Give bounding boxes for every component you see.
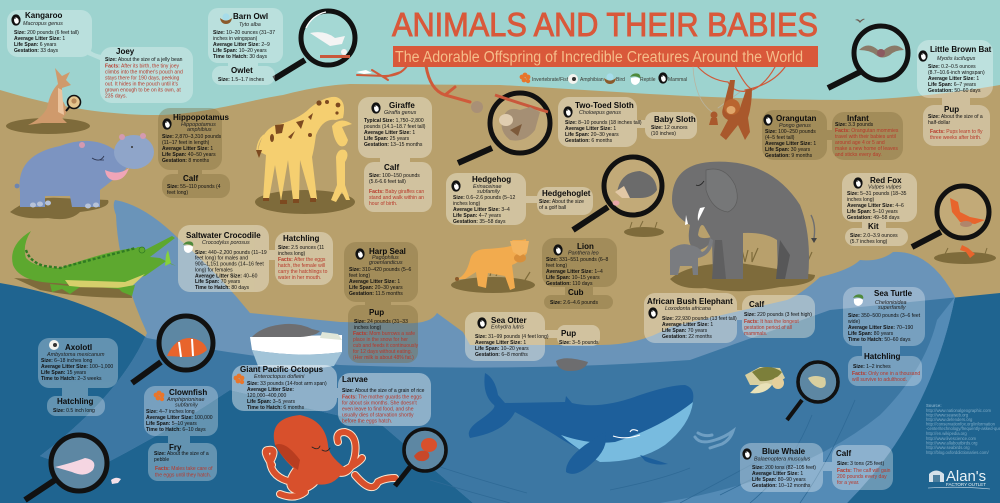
small axolotl	[111, 478, 121, 484]
small hedgehog ground patch	[624, 221, 664, 237]
panel: blue whale and calf: Gestation: 10–12 months	[752, 483, 811, 489]
panel: little brown bat and pup: Size: 0.2–0.5 ounces	[928, 64, 976, 70]
panel: sea otter and pup: Life Span: 10–20 years	[475, 346, 529, 352]
panel: blue whale and calf: Life Span: 80–90 years	[752, 477, 806, 483]
panel: clownfish and fry: Size: About the size of a	[154, 451, 209, 457]
magnifier: red fox	[912, 186, 989, 247]
legend: Mammal	[668, 77, 687, 83]
panel: hedgehog and hedgehoglet: inches long)	[453, 201, 481, 207]
panel: little brown bat and pup: Average Litter Size: 1	[928, 76, 979, 82]
panel: clownfish and fry: Size: 4–7 inches long	[146, 409, 195, 415]
icon: kangaroo joey magnifier	[66, 96, 80, 111]
panel: red fox and kit: Size: 5–31 pounds (18–35	[847, 191, 907, 197]
panel: kangaroo and joey: Average Litter Size: 1	[14, 36, 65, 42]
panel: hippopotamus and calf: Calf	[183, 174, 198, 183]
panel: harp seal and pup: feet long)	[349, 273, 370, 279]
panel: clownfish and fry: Average Litter Size: 100,000	[146, 415, 213, 421]
panel: little brown bat and pup: Size: About the size of a	[928, 114, 983, 120]
panel: sea otter and pup: Pup	[561, 329, 576, 338]
panel: hippopotamus and calf: (11–17 feet in length)	[162, 140, 210, 146]
panel: barn owl and owlet: Size: 1.5–1.7 inches	[218, 77, 264, 83]
panel: giraffe and calf: Life Span: 25 years	[364, 136, 410, 142]
panel: giraffe and calf: Giraffe	[389, 101, 415, 110]
panel: blue whale and calf: 200 pounds every day	[837, 474, 887, 480]
panel: orangutan and infant: Size: 3.3 pounds	[835, 122, 874, 128]
branches and vines	[357, 66, 785, 112]
panel: blue whale and calf: Calf	[836, 449, 851, 458]
panel: saltwater crocodile and hatchling: Size: 2.5 ounces (11	[278, 245, 324, 251]
panel: african bush elephant and calf: Facts: It has the longest	[744, 319, 799, 325]
panel: kangaroo and joey: Size: 200 pounds (6 feet tall)	[14, 30, 79, 36]
panel: orangutan and infant: Size: 100–250 pounds	[765, 129, 816, 135]
panel: hedgehog and hedgehoglet: Erinaceinae	[473, 184, 501, 190]
panel: red fox and kit: Kit	[868, 222, 879, 231]
panel: giant pacific octopus and larvae: Average Litter Size:	[247, 387, 294, 393]
panel: saltwater crocodile and hatchling: Life Span: 70 years	[195, 279, 241, 285]
panel: harp seal and pup: Harp Seal	[369, 247, 406, 256]
panel: hippopotamus and calf	[158, 108, 230, 198]
panel: sea turtle and hatchling: Size: 350–500 pounds (3–6 feet	[848, 313, 921, 319]
panel: orangutan and infant: travel with their babies until	[835, 134, 896, 140]
small owl on branch	[356, 70, 372, 74]
panel: axolotl and hatchling: Life Span: 15 years	[41, 370, 87, 376]
panel: giraffe and calf: Facts: Baby giraffes can	[369, 189, 424, 195]
panel: african bush elephant and calf: gestation period of all	[744, 325, 792, 331]
panel: hippopotamus and calf: feet long)	[167, 190, 188, 196]
panel: axolotl and hatchling: Hatchling	[57, 397, 94, 406]
panel: little brown bat and pup: Life Span: 6–7 years	[928, 82, 976, 88]
panel: giant pacific octopus and larvae: Facts: The mother guards the eggs	[342, 394, 422, 400]
small fox ground patch	[934, 245, 996, 264]
panel: saltwater crocodile and hatchling	[178, 225, 333, 292]
panel: blue whale and calf: Blue Whale	[762, 447, 806, 456]
panel: kangaroo and joey: Size: About the size of a jelly bean	[105, 57, 183, 63]
panel: lion and cub: Panthera leo	[568, 250, 599, 256]
panel: blue whale and calf	[740, 443, 893, 492]
panel: two-toed sloth and baby: Size: 12 ounces	[651, 125, 688, 131]
panel: kangaroo and joey: Gestation: 33 days	[14, 48, 59, 54]
panel: harp seal and pup: Life Span: 20–30 years	[349, 285, 403, 291]
sources list: http://www.nationalgeographic.com	[926, 408, 991, 413]
panel: sea otter and pup	[465, 312, 600, 361]
panel: giant pacific octopus and larvae: Larvae	[342, 375, 368, 384]
panel: clownfish and fry	[144, 386, 218, 481]
animal: ice floe and harp seal	[250, 324, 342, 369]
panel: kangaroo and joey: grown enough to be on its own, at	[105, 88, 181, 94]
panel: saltwater crocodile and hatchling: water in her mouth.	[278, 275, 321, 281]
legend: Bird	[616, 77, 625, 83]
panel: giant pacific octopus and larvae: even leave to find food, and she	[342, 406, 414, 412]
panel: little brown bat and pup: Myotis lucifugus	[937, 56, 976, 62]
panel: sea otter and pup: Gestation: 6–8 months	[475, 352, 528, 358]
panel: axolotl and hatchling: Average Litter Size: 100–1,000	[41, 364, 113, 370]
panel: blue whale and calf: for a year.	[837, 480, 859, 486]
panel: lion and cub: Size: 2.6–4.6 pounds	[550, 300, 598, 306]
panel: clownfish and fry: pebble	[154, 457, 169, 463]
panel: orangutan and infant: around age 4 or 5 and	[835, 140, 885, 146]
magnifier: sloth	[458, 93, 550, 163]
panel: red fox and kit	[842, 173, 917, 246]
panel: kangaroo and joey: Kangaroo	[25, 11, 62, 20]
panel: saltwater crocodile and hatchling: Average Litter Size: 40–60	[195, 274, 258, 280]
panel: clownfish and fry: Amphiprioninae	[166, 397, 204, 403]
panel: two-toed sloth and baby: Life Span: 20–30 years	[565, 132, 619, 138]
panel: two-toed sloth and baby: Size: 8–10 pounds (18 inches tall)	[565, 120, 642, 126]
panel: two-toed sloth and baby	[558, 97, 697, 147]
panel: harp seal and pup: (Her milk is about 48% fat.)	[353, 355, 414, 361]
panel: hippopotamus and calf: Hippopotamus	[181, 122, 216, 128]
panel: kangaroo and joey: out. It hides in the pouch until it's	[105, 82, 179, 88]
panel: hippopotamus and calf: Size: 55–110 pounds (4	[167, 184, 221, 190]
panel: giraffe and calf: Average Litter Size: 1	[364, 130, 415, 136]
panel: sea turtle and hatchling	[843, 287, 925, 386]
panel: little brown bat and pup: Little Brown Bat	[930, 45, 992, 54]
panel: little brown bat and pup	[917, 40, 993, 146]
panel: orangutan and infant: Pongo genus	[779, 123, 811, 129]
panel: harp seal and pup: Average Litter Size: 1	[349, 279, 400, 285]
panel: red fox and kit: Vulpes vulpes	[868, 184, 902, 190]
panel: harp seal and pup	[344, 242, 419, 363]
panel: african bush elephant and calf: Size: 220 pounds (3 feet high)	[744, 312, 812, 318]
panel: hippopotamus and calf: Gestation: 8 months	[162, 158, 210, 164]
panel: giraffe and calf: Giraffa genus	[384, 110, 417, 116]
giant whale silhouette	[40, 200, 955, 503]
panel: lion and cub: Average Litter Size: 1–4	[546, 269, 603, 275]
panel: orangutan and infant: make a new home of leaves	[835, 146, 898, 152]
panel: hedgehog and hedgehoglet: Life Span: 4–7 years	[453, 213, 501, 219]
legend	[520, 72, 687, 85]
panel: sea turtle and hatchling: will survive to adulthood.	[852, 377, 907, 383]
panel: giant pacific octopus and larvae: for about six months. She doesn't	[342, 400, 417, 406]
panel: saltwater crocodile and hatchling: Crocodylus porosus	[202, 240, 250, 246]
magnifier: octopus larva	[395, 429, 446, 486]
small clownfish	[202, 333, 208, 339]
panel: little brown bat and pup: three weeks after birth.	[930, 135, 981, 141]
panel: hippopotamus and calf: Average Litter Size: 1	[162, 146, 213, 152]
panel: hedgehog and hedgehoglet: Gestation: 35–58 days	[453, 219, 506, 225]
panel: hedgehog and hedgehoglet: Size: 0.6–2.6 pounds (5–12	[453, 195, 515, 201]
panel: barn owl and owlet	[208, 8, 283, 85]
magnifier: bat	[828, 26, 908, 88]
panel: sea turtle and hatchling: Size: 1–2 inches	[853, 364, 891, 370]
sources list: http://www.seaweb.org	[926, 412, 969, 418]
panel: harp seal and pup: Pagophilus	[372, 255, 399, 261]
panel: lion and cub: feet long)	[546, 263, 567, 269]
panel: harp seal and pup: Facts: Mom burrows a safe	[353, 331, 415, 337]
panel: sea otter and pup: Average Litter Size: 1	[475, 340, 526, 346]
sources list: http://en.wikipedia.org	[926, 431, 967, 436]
panel: red fox and kit: (5.7 inches long)	[850, 239, 888, 245]
animal: kangaroo	[6, 68, 90, 134]
panel: african bush elephant and calf: African Bush Elephant	[647, 297, 733, 306]
legend: Invertebrate/Fish	[532, 77, 570, 83]
panel: harp seal and pup: inches long)	[354, 325, 382, 331]
panel: blue whale and calf: Size: 200 tons (82–105 feet)	[752, 465, 816, 471]
panel: clownfish and fry: Facts: Males take care of	[155, 466, 213, 472]
panel: hippopotamus and calf: Size: 2,870–3,310 pounds	[162, 134, 222, 140]
panel: saltwater crocodile and hatchling: hatch, the female will	[278, 263, 325, 269]
panel: lion and cub: Life Span: 10–15 years	[546, 275, 600, 281]
sources list: Source:	[926, 403, 942, 408]
panel: giant pacific octopus and larvae	[232, 365, 431, 426]
panel: hedgehog and hedgehoglet: of a golf ball	[539, 205, 566, 211]
panel: sea turtle and hatchling: Facts: Only one in a thousand	[852, 371, 920, 377]
panel: saltwater crocodile and hatchling: Facts: After the eggs	[278, 257, 326, 263]
panel: barn owl and owlet: inches in wingspan)	[213, 36, 258, 42]
panel: giraffe and calf: Gestation: 13–15 months	[364, 142, 423, 148]
panel: kangaroo and joey: Facts: After its birth, the tiny joey	[105, 64, 180, 70]
panel: saltwater crocodile and hatchling: carry the hatchlings to	[278, 269, 328, 275]
panel: axolotl and hatchling: Ambystoma mexicanum	[46, 352, 105, 358]
panel: axolotl and hatchling: Time to Hatch: 2–3 weeks	[41, 376, 102, 382]
panel: kangaroo and joey: climbs into the mother's pouch and	[105, 70, 183, 76]
panel: sea otter and pup: Size: 31–99 pounds (4 feet long)	[475, 334, 549, 340]
panel: kangaroo and joey: Joey	[116, 47, 135, 56]
panel: little brown bat and pup: Facts: Pups learn to fly	[930, 129, 983, 135]
panel: barn owl and owlet: Time to Hatch: 30 days	[213, 54, 268, 60]
panel: giant pacific octopus and larvae: Giant Pacific Octopus	[240, 365, 324, 374]
panel: saltwater crocodile and hatchling: Time to Hatch: 80 days	[195, 285, 250, 291]
subtitle banner: The Adorable Offspring of Incredible Creatures Around the World	[395, 49, 803, 66]
panel: giraffe and calf	[358, 97, 432, 212]
animal: elephant with calf	[670, 162, 817, 291]
panel: kangaroo and joey	[7, 10, 193, 103]
sources list: http://www.livescience.com	[926, 436, 977, 441]
logo: Alan's Factory Outlet: Alan's	[946, 469, 986, 485]
magnifier: turtle hatchling	[787, 362, 838, 420]
panel: little brown bat and pup: Gestation: 50–60 days	[928, 88, 981, 94]
animal: orangutan	[709, 80, 752, 140]
animal: sea otter	[556, 358, 588, 371]
panel: orangutan and infant: Facts: Orangutan mommies	[835, 128, 899, 134]
panel: sea turtle and hatchling: superfamily	[878, 305, 906, 311]
panel: orangutan and infant: Infant	[847, 114, 869, 123]
panel: red fox and kit: Red Fox	[870, 176, 902, 185]
panel: giant pacific octopus and larvae: Life Span: 3–5 years	[247, 399, 295, 405]
panel: giant pacific octopus and larvae: before the eggs hatch.	[342, 418, 392, 424]
panel: clownfish and fry: Clownfish	[169, 388, 207, 397]
panel: two-toed sloth and baby: (10 inches)	[651, 131, 676, 137]
panel: barn owl and owlet: Tyto alba	[239, 22, 261, 28]
panel: giraffe and calf: (5.6-6.6 feet tall)	[369, 179, 406, 185]
panel: giant pacific octopus and larvae: usually dies of starvation shortly	[342, 412, 414, 418]
panel: barn owl and owlet: Size: 10–20 ounces (31–37	[213, 30, 275, 36]
panel: blue whale and calf: Balaenoptera musculus	[754, 456, 811, 462]
panel: hippopotamus and calf: amphibius	[187, 127, 212, 133]
panel: orangutan and infant: Orangutan	[776, 114, 817, 123]
panel: sea turtle and hatchling: Sea Turtle	[874, 289, 913, 298]
panel: giraffe and calf: Calf	[384, 163, 399, 172]
logo: Alan's Factory Outlet: FACTORY OUTLET	[946, 482, 986, 487]
animal: blue whale	[469, 373, 693, 474]
animal: giant pacific octopus	[266, 415, 395, 497]
panel: sea turtle and hatchling: Hatchling	[864, 352, 901, 361]
panel: saltwater crocodile and hatchling: feet long) for males and	[195, 256, 248, 262]
panel: harp seal and pup: for 12 days without eating.	[353, 349, 412, 355]
sources list: http://www.defenders.org	[926, 417, 973, 422]
magnifier: axolotl	[25, 435, 107, 500]
panel: african bush elephant and calf	[644, 293, 815, 343]
panel: sea turtle and hatchling: Chelonioidea	[875, 300, 906, 306]
panel: clownfish and fry: Fry	[169, 443, 182, 452]
panel: hedgehog and hedgehoglet: Hedgehoglet	[542, 189, 591, 198]
panel: orangutan and infant: Life Span: 30 years	[765, 147, 811, 153]
panel: saltwater crocodile and hatchling: 900–1,151 pounds (14–16 feet	[195, 262, 264, 268]
panel: harp seal and pup: Gestation: 11.5 months	[349, 291, 403, 297]
panel: two-toed sloth and baby: Choloepus genus	[579, 110, 621, 116]
panel: axolotl and hatchling: Size: 0.5 inch long	[53, 408, 95, 414]
panel: harp seal and pup: place in the snow for her	[353, 337, 408, 343]
panel: giraffe and calf: Typical Size: 1,750–2,800	[364, 118, 424, 124]
panel: lion and cub: Lion	[577, 242, 594, 251]
panel: hedgehog and hedgehoglet: Hedgehog	[472, 175, 511, 184]
small sloth	[471, 101, 483, 113]
sources list: http://www.allaboutbirds.org	[926, 440, 978, 446]
magnifier: owl	[274, 11, 355, 79]
panel: orangutan and infant	[762, 110, 903, 160]
animal: giraffe with calf	[255, 97, 355, 214]
panel: sea turtle and hatchling: Time to Hatch: 50–60 days	[848, 337, 911, 343]
small bat	[855, 19, 865, 23]
panel: sea otter and pup: Sea Otter	[491, 316, 527, 325]
magnifier: clownfish	[132, 316, 213, 383]
panel: red fox and kit: inches long)	[847, 197, 875, 203]
panel: barn owl and owlet: Life Span: 10–20 years	[213, 48, 267, 54]
panel: lion and cub: Size: 331–551 pounds (6–8	[546, 257, 608, 263]
panel: giraffe and calf: pounds (14.1–18.7 feet tall)	[364, 124, 426, 130]
panel: orangutan and infant: Gestation: 9 months	[765, 153, 813, 159]
panel: two-toed sloth and baby: Baby Sloth	[654, 115, 696, 124]
panel: clownfish and fry: the eggs until they hatch.	[155, 472, 211, 478]
panel: african bush elephant and calf: Loxodonta africana	[665, 306, 711, 312]
panel: blue whale and calf: Facts: The calf will gain	[837, 468, 891, 474]
panel: lion and cub: Cub	[568, 288, 584, 297]
panel: red fox and kit: Gestation: 49–58 days	[847, 215, 900, 221]
sources list	[926, 403, 1000, 455]
panel: sea turtle and hatchling: wide)	[848, 319, 860, 325]
panel: hedgehog and hedgehoglet: Size: About the size	[539, 199, 584, 205]
panel: african bush elephant and calf: Average Litter Size: 1	[662, 322, 713, 328]
panel: giraffe and calf: stand and walk within an	[369, 195, 424, 201]
panel: harp seal and pup: groenlandicus	[369, 260, 403, 266]
panel: blue whale and calf: Size: 3 tons (25 feet)	[837, 461, 884, 467]
panel: two-toed sloth and baby: Average Litter Size: 1	[565, 126, 616, 132]
panel: african bush elephant and calf: mammals.	[744, 331, 767, 337]
panel: saltwater crocodile and hatchling: Size: 440–2,200 pounds (11–19	[195, 250, 267, 256]
panel: sea turtle and hatchling: Life Span: 80 years	[848, 331, 894, 337]
panel: orangutan and infant: and sticks every day.	[835, 152, 882, 158]
panel: harp seal and pup: cub and feeds it continuously	[353, 343, 419, 349]
logo: Alan's Factory Outlet	[928, 469, 990, 489]
magnifier: hedgehog	[573, 157, 662, 230]
panel: two-toed sloth and baby: Gestation: 6 months	[565, 138, 613, 144]
panel: clownfish and fry: Life Span: 5–10 years	[146, 421, 197, 427]
background ocean	[0, 283, 1000, 503]
panel: giant pacific octopus and larvae: Size: About the size of a grain of rice	[342, 388, 425, 394]
panel: african bush elephant and calf: Life Span: 70 years	[662, 328, 708, 334]
panel: african bush elephant and calf: Calf	[749, 300, 764, 309]
legend: Reptile	[640, 77, 656, 83]
sources list: http://blog.oxforddictionaries.com/	[926, 450, 989, 455]
panel: lion and cub	[542, 238, 617, 309]
panel: giant pacific octopus and larvae: Time to Hatch: 6 months	[247, 405, 305, 411]
panel: red fox and kit: Life Span: 5–10 years	[847, 209, 898, 215]
panel: harp seal and pup: Size: 24 pounds (31–33	[354, 319, 408, 325]
title: ANIMALS AND THEIR BABIES	[392, 6, 818, 43]
panel: red fox and kit: Average Litter Size: 4–6	[847, 203, 904, 209]
panel: sea otter and pup: Enhydra lutris	[491, 324, 524, 330]
panel: saltwater crocodile and hatchling: long) for females	[195, 268, 233, 274]
panel: saltwater crocodile and hatchling: inches long)	[278, 251, 306, 257]
panel: saltwater crocodile and hatchling: Hatchling	[283, 234, 320, 243]
panel: blue whale and calf: Average Litter Size: 1	[752, 471, 803, 477]
panel: clownfish and fry: subfamily	[175, 402, 198, 408]
animal: crocodile	[12, 231, 176, 298]
panel: giraffe and calf: hour of birth.	[369, 201, 397, 207]
panel: little brown bat and pup: Pup	[944, 105, 959, 114]
panel: hippopotamus and calf: Hippopotamus	[173, 113, 230, 122]
panel: little brown bat and pup: half-dollar	[928, 120, 950, 126]
panel: axolotl and hatchling	[38, 338, 118, 416]
panel: hedgehog and hedgehoglet	[446, 173, 593, 225]
panel: sea turtle and hatchling: Average Litter Size: 70–190	[848, 325, 913, 331]
animal: lion with cub	[451, 239, 535, 293]
panel: hippopotamus and calf: Life Span: 40–50 years	[162, 152, 216, 158]
panel: giraffe and calf: Size: 100–150 pounds	[369, 173, 420, 179]
animal: hippopotamus family	[10, 133, 154, 219]
panel: african bush elephant and calf: Gestation: 22 months	[662, 334, 712, 340]
panel: clownfish and fry: Time to Hatch: 6–10 days	[146, 427, 206, 433]
sources list: http://www.seabirds.org	[926, 445, 970, 450]
panel: giant pacific octopus and larvae: 120,000–400,000	[247, 393, 286, 399]
panel: lion and cub: Gestation: 110 days	[546, 281, 593, 287]
panel: giant pacific octopus and larvae: Size: 33 pounds (14-foot arm span)	[247, 381, 327, 387]
panel: orangutan and infant: Average Litter Size: 1	[765, 141, 816, 147]
panel: axolotl and hatchling: Size: 6–18 inches long	[41, 358, 93, 364]
panel: hedgehog and hedgehoglet: subfamily	[477, 189, 500, 195]
panel: two-toed sloth and baby: Two-Toed Sloth	[575, 101, 634, 110]
panel: red fox and kit: Size: 2.0–3.9 ounces	[850, 233, 898, 239]
panel: kangaroo and joey: stays there for 190 days, peeking	[105, 76, 180, 82]
panel: sea otter and pup: Size: 3–5 pounds	[559, 340, 599, 346]
panel: kangaroo and joey: 235 days.	[105, 94, 127, 100]
panel: african bush elephant and calf: Size: 22,930 pounds (13 feet tall)	[662, 316, 737, 322]
panel: axolotl and hatchling: Axolotl	[65, 343, 92, 352]
panel: little brown bat and pup: (8.7–10.6-inch wingspan)	[928, 70, 985, 76]
sources list: http://conservationfox.org/information	[926, 422, 996, 426]
legend: Amphibian	[580, 77, 604, 83]
panel: barn owl and owlet: Average Litter Size: 2–9	[213, 42, 270, 48]
panel: harp seal and pup: Pup	[369, 308, 384, 317]
panel: saltwater crocodile and hatchling: Saltwater Crocodile	[186, 231, 261, 240]
animal: sea turtle	[745, 367, 785, 393]
panel: kangaroo and joey: Macropus genus	[23, 21, 63, 27]
panel: barn owl and owlet: Owlet	[231, 66, 253, 75]
panel: kangaroo and joey: Life Span: 6 years	[14, 42, 57, 48]
panel: harp seal and pup: Size: 310–420 pounds (5–6	[349, 267, 411, 273]
panel: barn owl and owlet: Barn Owl	[233, 12, 268, 21]
panel: giant pacific octopus and larvae: Enteroctopus dofleini	[254, 374, 305, 380]
panel: hedgehog and hedgehoglet: Average Litter Size: 3–4	[453, 207, 510, 213]
panel: orangutan and infant: (4–5 feet tall)	[765, 135, 795, 141]
